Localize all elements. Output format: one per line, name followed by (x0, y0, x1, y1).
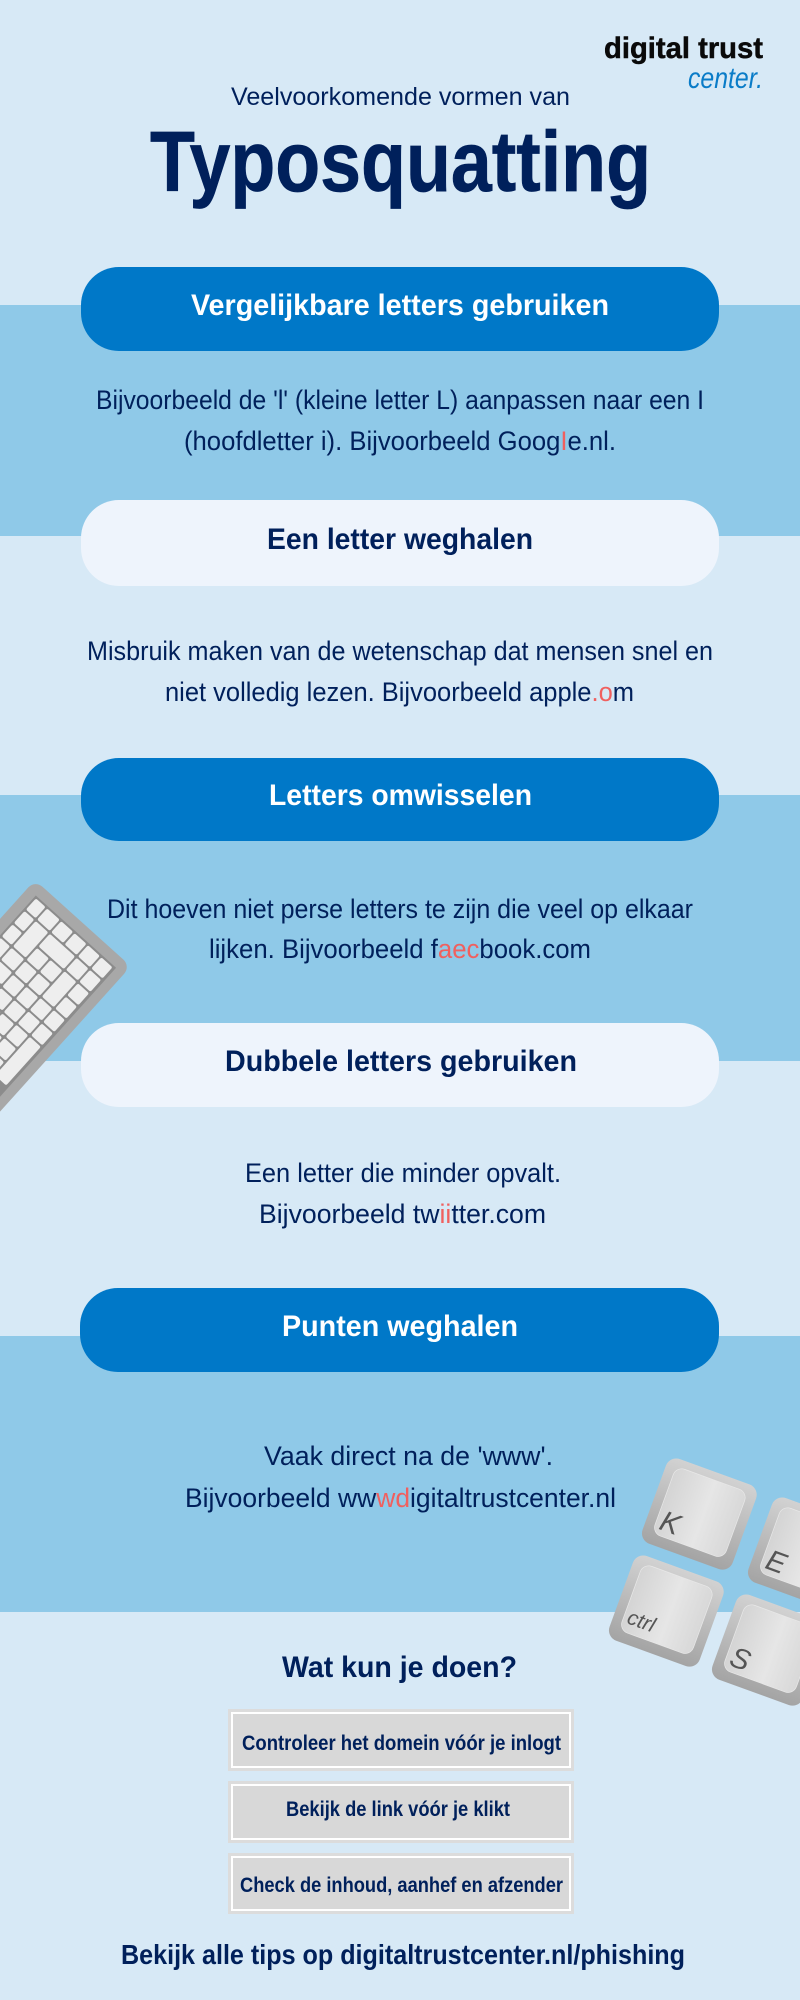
pill: Vergelijkbare letters gebruiken (81, 267, 719, 351)
logo: digital trust center (604, 32, 763, 95)
text: letters omwisselen (107, 894, 693, 964)
key: E: E (761, 1544, 791, 1581)
pill: Letters omwisselen (81, 758, 719, 841)
text: een letter weghalen (87, 636, 713, 707)
key: ctrl: ctrl (624, 1606, 660, 1638)
tip box: inhoud (230, 1854, 572, 1912)
pill: Punten weghalen (80, 1288, 719, 1372)
pill: Een letter weghalen: Een letter weghalen (267, 523, 533, 556)
text: een letter weghalen: Misbruik maken van de wetenschap dat mensen snel en (87, 636, 713, 666)
text: dubbele letters: Een letter die minder opvalt. (245, 1158, 561, 1188)
pill: Een letter weghalen (81, 500, 719, 586)
footer link text: Bekijk alle tips op digitaltrustcenter.nl/phishing (121, 1939, 685, 1970)
pill: Dubbele letters gebruiken (81, 1023, 719, 1107)
logo: digital trust center: digital trust (604, 32, 763, 65)
key: S (709, 1591, 800, 1709)
text: vergelijkbare letters: (hoofdletter i). Bijvoorbeeld GoogIe.nl. (184, 426, 616, 456)
tip box: domein (230, 1710, 572, 1770)
pill: Punten weghalen: Punten weghalen (282, 1310, 518, 1343)
pill: Vergelijkbare letters gebruiken: Vergelijkbare letters gebruiken (191, 289, 609, 322)
key: E (745, 1494, 800, 1612)
text: letters omwisselen: lijken. Bijvoorbeeld faecbook.com (209, 934, 591, 964)
text: vergelijkbare letters: Bijvoorbeeld de 'l' (kleine letter L) aanpassen naar een I (96, 385, 704, 415)
key: K (639, 1455, 760, 1573)
tip box: link: Bekijk de link vóór je klikt (286, 1798, 510, 1821)
text: punten weghalen: Bijvoorbeeld wwwdigitaltrustcenter.nl (185, 1483, 616, 1513)
key: ctrl (606, 1552, 727, 1670)
logo: digital trust center: center. (688, 62, 763, 95)
key: K: K (655, 1505, 686, 1543)
pill: Letters omwisselen: Letters omwisselen (269, 779, 532, 812)
tip box: inhoud: Check de inhoud, aanhef en afzender (240, 1874, 563, 1897)
heading: Wat kun je doen?: Wat kun je doen? (282, 1651, 517, 1684)
text: vergelijkbare letters (96, 385, 704, 456)
tip box: domein: Controleer het domein vóór je inlogt (242, 1732, 561, 1755)
text: een letter weghalen: niet volledig lezen. Bijvoorbeeld apple.om (165, 677, 634, 707)
key: S: S (725, 1641, 755, 1678)
text: dubbele letters (245, 1158, 561, 1229)
text: dubbele letters: Bijvoorbeeld twiitter.com (259, 1199, 546, 1229)
subtitle: Veelvoorkomende vormen van (231, 83, 570, 111)
text: punten weghalen (185, 1441, 616, 1513)
illustration: keyboard (0, 880, 131, 1212)
pill: Dubbele letters gebruiken: Dubbele letters gebruiken (225, 1045, 577, 1078)
text: letters omwisselen: Dit hoeven niet perse letters te zijn die veel op elkaar (107, 894, 693, 924)
illustration: keyboard keys (606, 1455, 800, 1709)
text: punten weghalen: Vaak direct na de 'www'. (264, 1441, 553, 1471)
title: Typosquatting (150, 115, 651, 210)
tip box: link (230, 1782, 572, 1842)
